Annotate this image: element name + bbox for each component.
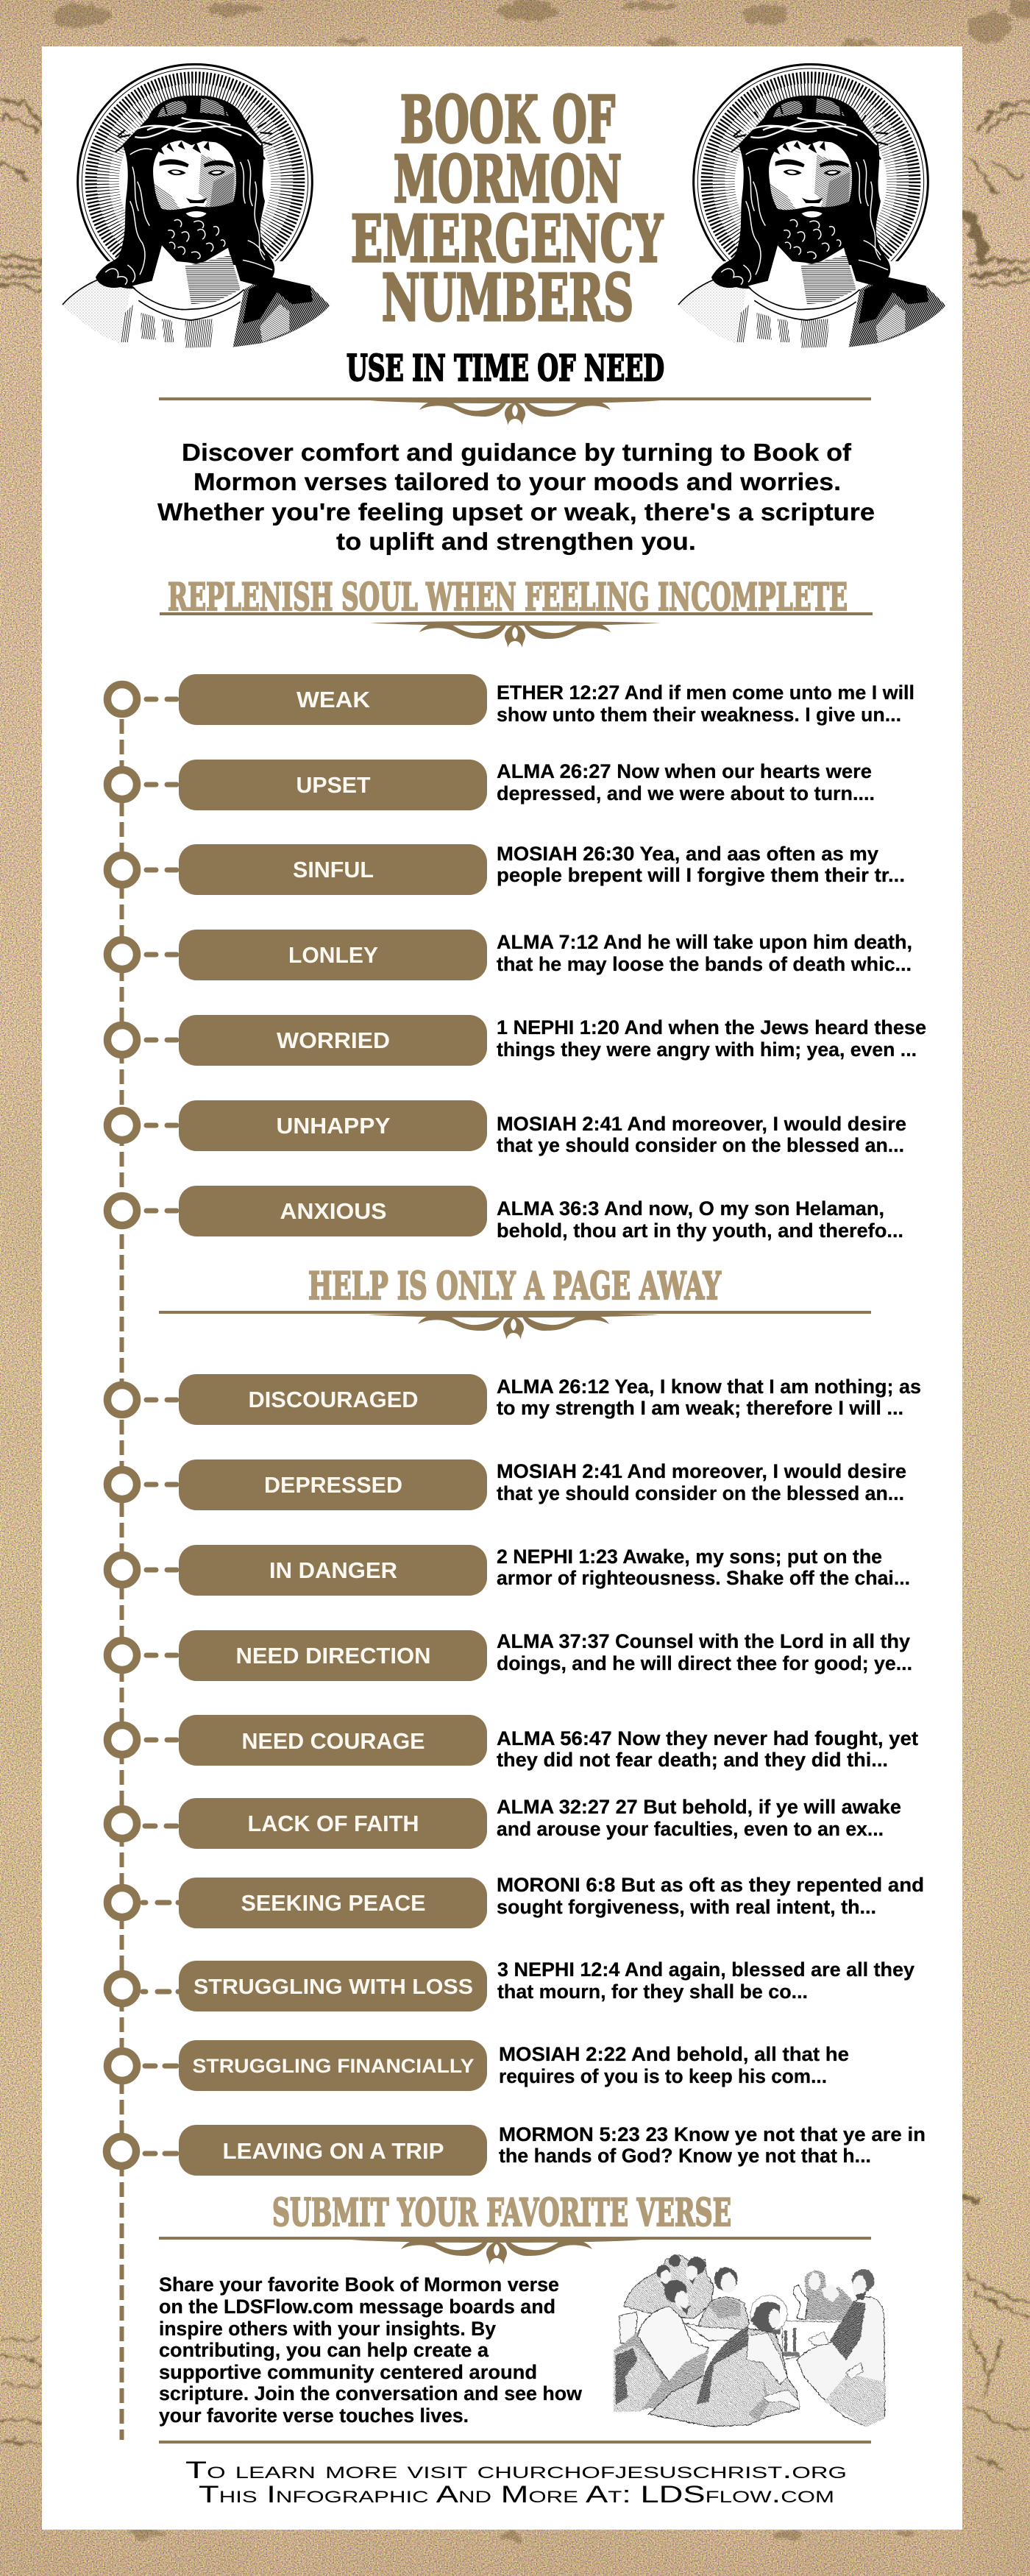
intro text: to uplift and strengthen you. <box>336 528 696 555</box>
row: unhappy: MOSIAH 2:41 And moreover, I would desire <box>497 1113 906 1135</box>
row: leaving on a trip: the hands of God? Know ye not that h... <box>499 2145 871 2167</box>
row: in danger: IN DANGER <box>269 1557 397 1583</box>
row: struggling with loss: STRUGGLING WITH LOSS <box>193 1975 473 1999</box>
row: anxious <box>107 1186 903 1242</box>
row: sinful <box>107 843 905 895</box>
row: discouraged: DISCOURAGED <box>249 1387 418 1412</box>
row: upset: ALMA 26:27 Now when our hearts were <box>497 760 872 782</box>
row: need direction: doings, and he will direct thee for good; ye... <box>497 1652 912 1674</box>
submit verse text: Share your favorite Book of Mormon verse <box>159 2274 559 2296</box>
row: need direction: NEED DIRECTION <box>235 1643 431 1669</box>
row: lack of faith: LACK OF FAITH <box>247 1811 419 1836</box>
row: weak: show unto them their weakness. I give un... <box>497 704 901 726</box>
row: leaving on a trip: MORMON 5:23 23 Know ye not that ye are in <box>499 2123 926 2145</box>
row: depressed: that ye should consider on the blessed an... <box>497 1482 904 1504</box>
divider with ornament <box>159 1311 871 1340</box>
title: MORMON <box>394 141 622 217</box>
row: seeking peace: MORONI 6:8 But as oft as they repented and <box>497 1874 924 1896</box>
row: weak: ETHER 12:27 And if men come unto me I will <box>497 682 914 704</box>
row: leaving on a trip: LEAVING ON A TRIP <box>222 2138 444 2164</box>
row: struggling financially: MOSIAH 2:22 And behold, all that he <box>499 2043 849 2065</box>
row: anxious: ANXIOUS <box>280 1198 387 1224</box>
row: struggling financially <box>107 2040 849 2091</box>
divider with ornament <box>160 612 873 648</box>
row: need direction: ALMA 37:37 Counsel with the Lord in all thy <box>497 1630 910 1652</box>
row: worried <box>107 1015 926 1066</box>
row: anxious: ALMA 36:3 And now, O my son Helaman, <box>497 1197 884 1220</box>
row: sinful: SINFUL <box>293 857 374 882</box>
row: sinful: MOSIAH 26:30 Yea, and aas often as my <box>497 843 878 865</box>
footer text: This Infographic And More At: LDSflow.com <box>199 2481 834 2508</box>
row: lonley: that he may loose the bands of death whic... <box>497 953 912 975</box>
row: sinful: people brepent will I forgive them their tr... <box>497 864 905 886</box>
row: worried: things they were angry with him; yea, even ... <box>497 1038 917 1061</box>
row: struggling financially: requires of you is to keep his com... <box>499 2065 827 2087</box>
row: weak <box>107 674 914 726</box>
row: seeking peace <box>107 1874 924 1928</box>
row: lack of faith <box>107 1796 901 1849</box>
row: unhappy: that ye should consider on the blessed an... <box>497 1134 904 1156</box>
timeline dashed line <box>119 719 124 2440</box>
row: need courage: they did not fear death; and they did thi... <box>497 1749 888 1771</box>
row: struggling with loss: that mourn, for they shall be co... <box>497 1981 808 2003</box>
row: need courage: NEED COURAGE <box>241 1728 425 1754</box>
intro text: Whether you're feeling upset or weak, there's a scripture <box>157 498 875 526</box>
row: lack of faith: and arouse your faculties, even to an ex... <box>497 1818 884 1840</box>
row: lack of faith: ALMA 32:27 27 But behold, if ye will awake <box>497 1796 901 1818</box>
subtitle: USE IN TIME OF NEED <box>347 347 664 389</box>
submit verse text: supportive community centered around <box>159 2361 537 2383</box>
row: worried: 1 NEPHI 1:20 And when the Jews heard these <box>497 1016 926 1038</box>
illustration: engraving of Christ washing feet <box>614 2254 885 2427</box>
row: upset: UPSET <box>296 772 371 798</box>
title <box>351 82 664 336</box>
intro text <box>157 439 875 555</box>
row: discouraged <box>107 1374 921 1425</box>
submit verse text <box>159 2274 583 2427</box>
row: need courage: ALMA 56:47 Now they never had fought, yet <box>497 1727 918 1749</box>
section heading: help is only a page away: HELP IS ONLY A PAGE AWAY <box>308 1264 721 1309</box>
row: struggling with loss: 3 NEPHI 12:4 And again, blessed are all they <box>497 1958 914 1981</box>
title: EMERGENCY <box>351 201 664 277</box>
row: unhappy: UNHAPPY <box>277 1113 391 1139</box>
row: upset: depressed, and we were about to turn.... <box>497 782 875 804</box>
submit verse text: scripture. Join the conversation and see how <box>159 2382 583 2405</box>
row: unhappy <box>107 1100 906 1156</box>
row: in danger: 2 NEPHI 1:23 Awake, my sons; put on the <box>497 1546 882 1568</box>
row: worried: WORRIED <box>277 1027 390 1053</box>
row: depressed <box>107 1459 906 1510</box>
section heading: submit your favorite verse: SUBMIT YOUR FAVORITE VERSE <box>272 2191 731 2235</box>
submit verse text: your favorite verse touches lives. <box>159 2405 469 2427</box>
row: in danger <box>107 1545 910 1596</box>
row: depressed: MOSIAH 2:41 And moreover, I would desire <box>497 1460 906 1482</box>
title: BOOK OF <box>400 82 615 158</box>
row: need direction <box>107 1630 912 1681</box>
submit verse text: contributing, you can help create a <box>159 2339 489 2361</box>
row: discouraged: to my strength I am weak; therefore I will ... <box>497 1397 903 1419</box>
row: discouraged: ALMA 26:12 Yea, I know that I am nothing; as <box>497 1376 921 1398</box>
row: lonley: LONLEY <box>288 942 378 968</box>
icon: left Christ portrait <box>63 64 330 348</box>
row: leaving on a trip <box>107 2123 926 2176</box>
row: in danger: armor of righteousness. Shake off the chai... <box>497 1567 910 1589</box>
row: struggling with loss <box>107 1958 914 2011</box>
submit verse text: inspire others with your insights. By <box>159 2318 496 2340</box>
footer text: To learn more visit churchofjesuschrist.org <box>185 2457 847 2483</box>
row: weak: WEAK <box>296 687 371 712</box>
bottom divider <box>159 2441 871 2444</box>
divider with ornament <box>159 397 871 425</box>
submit verse text: on the LDSFlow.com message boards and <box>159 2296 555 2318</box>
row: lonley <box>107 930 912 980</box>
icon: right Christ portrait <box>678 64 945 348</box>
row: depressed: DEPRESSED <box>264 1472 402 1498</box>
title: NUMBERS <box>382 260 633 336</box>
row: anxious: behold, thou art in thy youth, and therefo... <box>497 1220 903 1242</box>
row: seeking peace: sought forgiveness, with real intent, th... <box>497 1896 876 1918</box>
divider with ornament <box>159 2237 871 2265</box>
row: need courage <box>107 1715 918 1771</box>
intro text: Discover comfort and guidance by turning to Book of <box>182 439 852 466</box>
row: lonley: ALMA 7:12 And he will take upon him death, <box>497 931 912 953</box>
row: upset <box>107 760 875 810</box>
footer text <box>185 2457 847 2508</box>
row: struggling financially: STRUGGLING FINANCIALLY <box>193 2055 474 2077</box>
row: seeking peace: SEEKING PEACE <box>241 1890 425 1916</box>
intro text: Mormon verses tailored to your moods and worries. <box>193 468 841 495</box>
